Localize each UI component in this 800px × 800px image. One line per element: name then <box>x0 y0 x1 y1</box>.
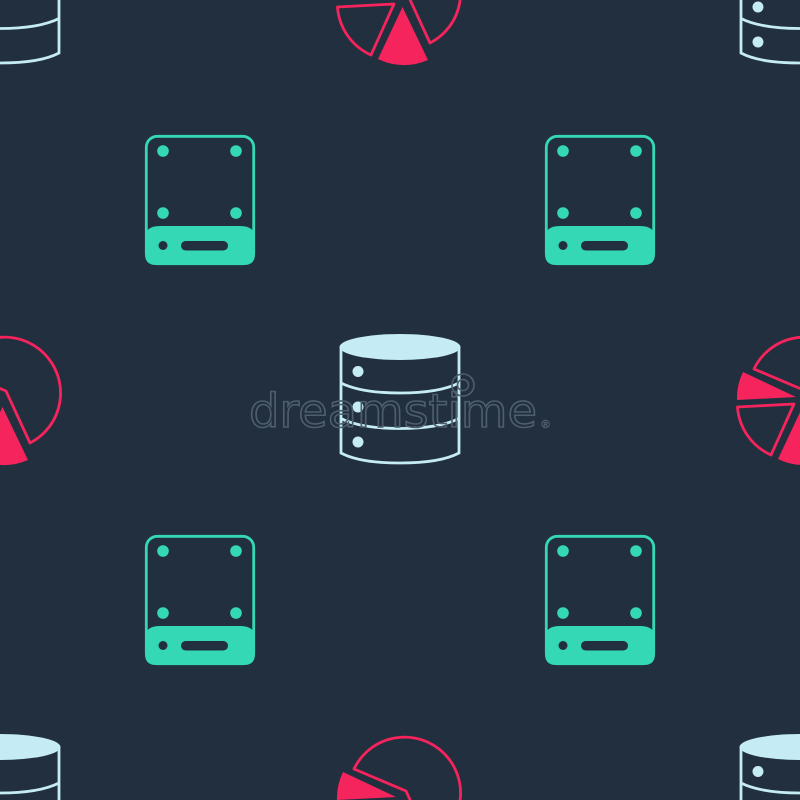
icon: database corner top right <box>740 0 800 63</box>
icon: pie chart left edge <box>0 337 61 465</box>
icon: hard drive bottom left <box>145 536 255 665</box>
icon: pie chart top edge <box>337 0 461 65</box>
icon: database center <box>340 334 460 463</box>
icon: database corner bottom right <box>740 734 800 800</box>
icon: database corner bottom left <box>0 734 60 800</box>
icon: pie chart bottom edge <box>337 737 461 800</box>
icon: hard drive top left <box>145 136 255 265</box>
icon: hard drive bottom right <box>545 536 655 665</box>
icon: hard drive top right <box>545 136 655 265</box>
watermark: dreamstime <box>249 384 537 438</box>
icon: pie chart right edge <box>737 337 800 465</box>
icon: database corner top left <box>0 0 60 63</box>
watermark: ® <box>542 419 550 431</box>
